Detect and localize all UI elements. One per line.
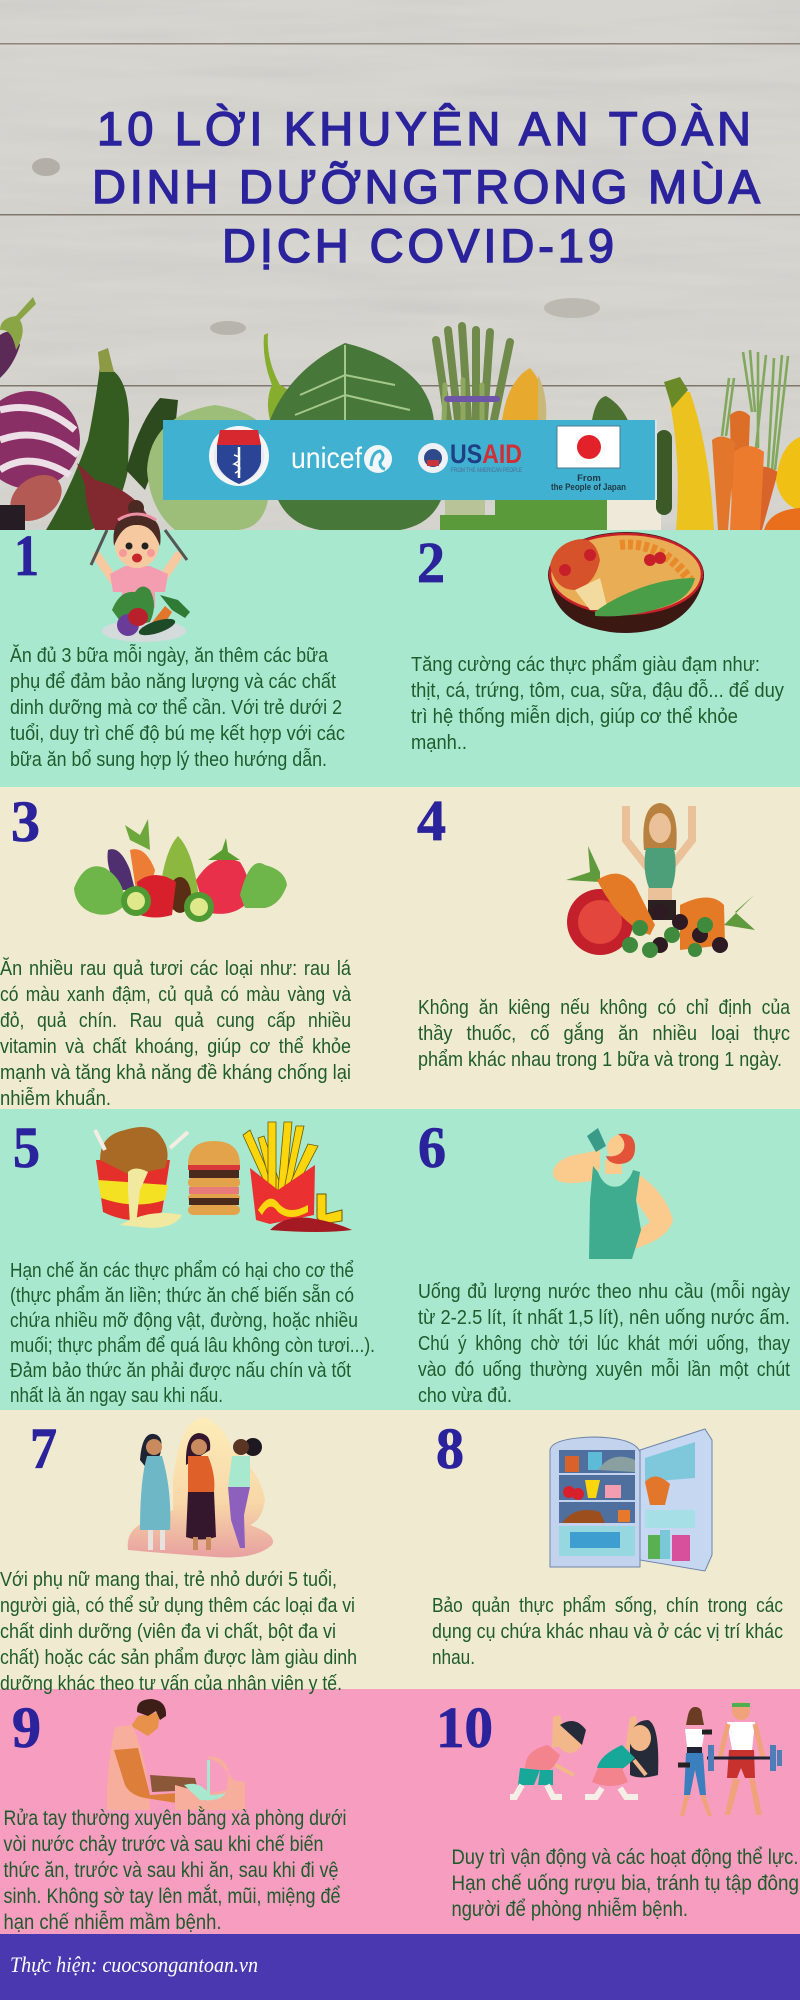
text bbox=[418, 996, 791, 1071]
red onion bbox=[77, 463, 153, 530]
title bbox=[92, 102, 761, 272]
text: dinh dưỡng mà cơ thể cần. Với trẻ dưới 2 bbox=[10, 696, 342, 719]
band: tips 5-6 bbox=[0, 1109, 800, 1410]
icon: vegetables group bbox=[74, 819, 287, 922]
small cucumber bbox=[592, 396, 630, 425]
partner logo bar bbox=[163, 420, 657, 500]
number 3: 3 bbox=[11, 789, 40, 854]
text bbox=[452, 1846, 799, 1921]
text: Rửa tay thường xuyên bằng xà phòng dưới bbox=[4, 1807, 346, 1830]
panel: tip 8 bbox=[432, 1416, 783, 1669]
panel: tip 2 bbox=[411, 530, 785, 754]
yellow squash bbox=[668, 392, 714, 530]
text: nhất là ăn ngay sau khi nấu. bbox=[10, 1384, 223, 1407]
panel: tip 1 bbox=[10, 500, 345, 771]
text: hạn chế nhiễm mầm bệnh. bbox=[4, 1911, 222, 1934]
text: cho vừa đủ. bbox=[418, 1384, 512, 1407]
logo: Ministry of Health bbox=[209, 426, 269, 486]
header vegetables bbox=[0, 297, 800, 530]
carrots bbox=[712, 350, 788, 530]
text: (thực phẩm ăn liền; thức ăn chế biến sẵn có bbox=[10, 1284, 354, 1307]
eggplant bbox=[0, 297, 36, 378]
text bbox=[10, 644, 345, 771]
icon: open fridge bbox=[550, 1429, 712, 1571]
text: chất) hoặc các sản phẩm được làm giàu dinh bbox=[0, 1646, 357, 1669]
icon: man drinking water bbox=[553, 1128, 673, 1259]
text: nhau. bbox=[432, 1646, 475, 1669]
text: thức ăn, trước và sau khi ăn, sau khi đi vệ bbox=[4, 1859, 338, 1882]
text bbox=[432, 1594, 783, 1669]
text: Ăn nhiều rau quả tươi các loại như: rau lá bbox=[0, 957, 352, 980]
panel: tip 6 bbox=[418, 1115, 791, 1407]
radicchio bbox=[0, 391, 80, 489]
header wood background bbox=[0, 0, 800, 530]
number 7: 7 bbox=[30, 1416, 57, 1481]
text: Tăng cường các thực phẩm giàu đạm như: bbox=[411, 653, 760, 676]
text bbox=[10, 1259, 375, 1407]
icon: food bowl bbox=[548, 532, 704, 633]
text: chứa nhiều mỡ động vật, đường, hoặc nhiều bbox=[10, 1309, 358, 1332]
icon: three pregnant women bbox=[128, 1417, 273, 1558]
text: Hạn chế ăn các thực phẩm có hại cho cơ thể bbox=[10, 1259, 354, 1282]
logo: USAID bbox=[418, 439, 522, 474]
dark cucumber bbox=[126, 398, 178, 490]
number 6: 6 bbox=[418, 1115, 446, 1180]
text: dưỡng khác theo tư vấn của nhân viên y tế. bbox=[0, 1672, 342, 1695]
text: người già, có thể sử dụng thêm các loại đa vi bbox=[0, 1594, 355, 1617]
potato bbox=[2, 466, 70, 530]
text: trì hệ thống miễn dịch, giúp cơ thể khỏe bbox=[411, 705, 738, 728]
corn bbox=[502, 368, 546, 420]
number 4: 4 bbox=[417, 788, 446, 853]
text: vitamin và chất khoáng, giúp cơ thể khỏe bbox=[0, 1035, 351, 1058]
title: DỊCH COVID-19 bbox=[222, 219, 614, 272]
zucchini bbox=[46, 348, 129, 530]
text: chất dinh dưỡng (viên đa vi chất, bột đa vi bbox=[0, 1620, 336, 1643]
text: Với phụ nữ mang thai, trẻ nhỏ dưới 5 tuổi, bbox=[0, 1568, 337, 1591]
text: tuổi, duy trì chế độ bú mẹ kết hợp với các bbox=[10, 722, 345, 745]
text: mạnh.. bbox=[411, 731, 467, 754]
text bbox=[0, 1568, 357, 1695]
text: Ăn đủ 3 bữa mỗi ngày, ăn thêm các bữa bbox=[10, 644, 329, 667]
text: nhiễm khuẩn. bbox=[0, 1087, 111, 1110]
broccoli and cauliflower bbox=[440, 500, 661, 530]
text bbox=[411, 653, 785, 754]
logo: unicef: unicef bbox=[291, 442, 363, 475]
savoy cabbage bbox=[270, 343, 441, 530]
asparagus bbox=[436, 326, 510, 420]
logo: Japan flag: the People of Japan bbox=[551, 482, 626, 493]
icon: people exercising bbox=[510, 1702, 782, 1816]
panel: tip 10 bbox=[436, 1695, 799, 1921]
icon: man washing hands bbox=[107, 1699, 245, 1810]
text bbox=[418, 1280, 791, 1407]
number 2: 2 bbox=[417, 530, 445, 595]
title: DINH DƯỠNGTRONG MÙA bbox=[92, 160, 761, 213]
logo: Japan flag: From bbox=[577, 473, 601, 484]
title: 10 LỜI KHUYÊN AN TOÀN bbox=[97, 102, 751, 155]
footer bbox=[0, 1934, 800, 2000]
text: mạnh và tăng khả năng đề kháng chống lại bbox=[0, 1061, 351, 1084]
band: tips 3-4 bbox=[0, 787, 800, 1109]
number 9: 9 bbox=[12, 1695, 41, 1760]
number 8: 8 bbox=[436, 1416, 464, 1481]
text: muối; thực phẩm để quá lâu không còn tươi...). bbox=[10, 1334, 375, 1357]
text: người để phòng nhiễm bệnh. bbox=[452, 1898, 688, 1921]
text bbox=[0, 957, 352, 1110]
number 10: 10 bbox=[436, 1695, 493, 1760]
light cabbage bbox=[147, 405, 268, 530]
logo: Japan flag bbox=[551, 426, 626, 493]
icon: fast food bbox=[95, 1122, 352, 1232]
yellow pepper and tomato bbox=[764, 437, 800, 530]
band: tips 7-8 bbox=[0, 1410, 800, 1689]
band: tips 9-10 bbox=[0, 1689, 800, 1934]
number 1: 1 bbox=[14, 523, 39, 588]
text: phụ để đảm bảo năng lượng và các chất bbox=[10, 670, 336, 693]
panel: tip 4 bbox=[417, 788, 791, 1071]
number 5: 5 bbox=[13, 1115, 40, 1180]
text: bữa ăn bổ sung hợp lý theo hướng dẫn. bbox=[10, 748, 327, 771]
text: sinh. Không sờ tay lên mắt, mũi, miệng để bbox=[4, 1885, 340, 1908]
logo: USAID: USAID bbox=[450, 439, 522, 469]
text: đỏ, quả chín. Rau quả cung cấp nhiều bbox=[0, 1009, 351, 1032]
panel: tip 3 bbox=[0, 789, 352, 1110]
text bbox=[4, 1807, 346, 1934]
icon: girl with vegetables bbox=[91, 500, 190, 642]
band: tips 1-2 bbox=[0, 530, 800, 787]
green pepper bbox=[264, 333, 296, 423]
text: Đảm bảo thức ăn phải được nấu chín và tốt bbox=[10, 1359, 351, 1382]
icon: woman with vegetables bbox=[566, 803, 755, 958]
logo: USAID: FROM THE AMERICAN PEOPLE bbox=[451, 468, 522, 474]
text: vòi nước chảy trước và sau khi chế biến bbox=[4, 1833, 324, 1856]
panel: tip 9 bbox=[4, 1695, 346, 1934]
text: có màu xanh đậm, củ quả có màu vàng và bbox=[0, 983, 352, 1006]
panel: tip 7 bbox=[0, 1416, 357, 1695]
footer credit: Thực hiện: cuocsongantoan.vn bbox=[10, 1952, 258, 1977]
panel: tip 5 bbox=[10, 1115, 375, 1407]
